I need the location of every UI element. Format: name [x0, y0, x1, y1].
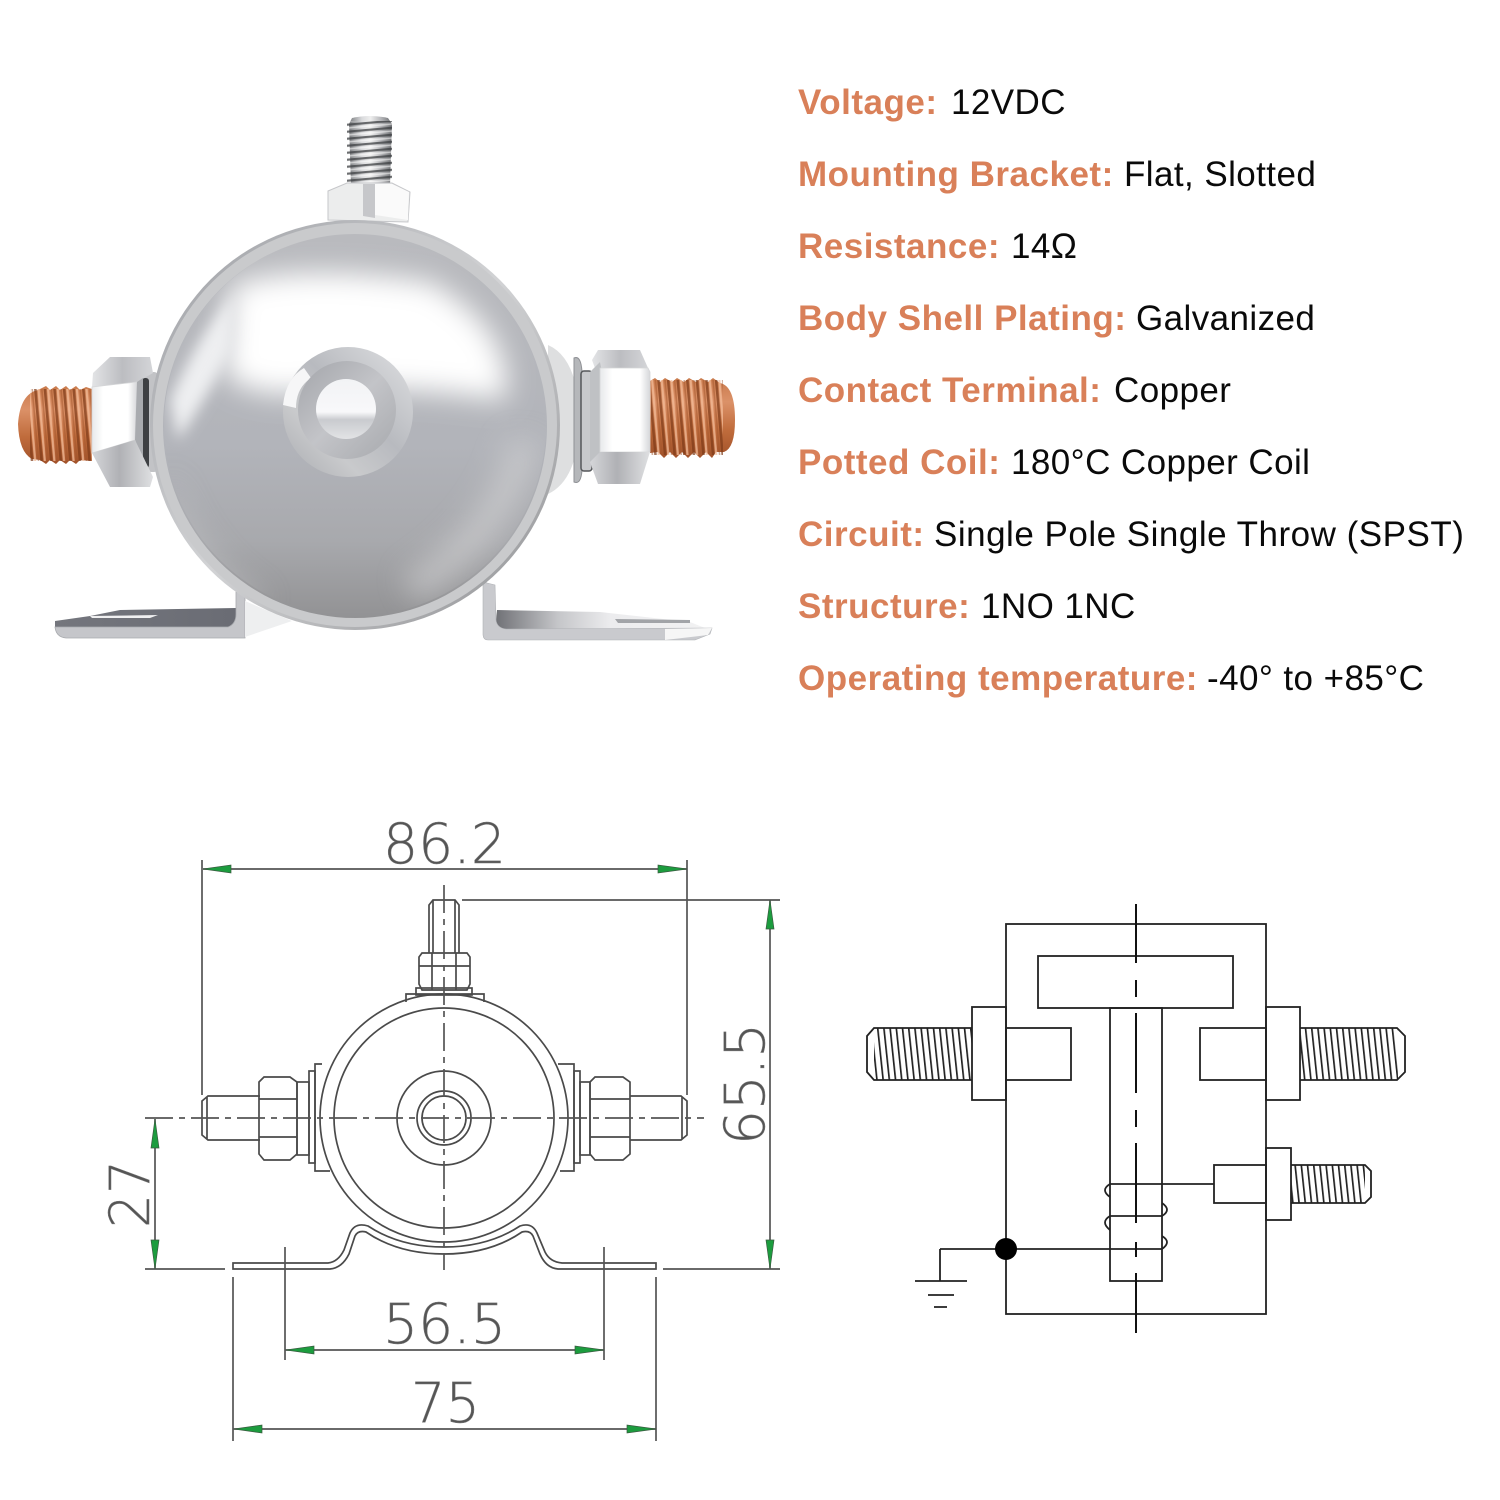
- schematic: housing: [1006, 924, 1266, 1314]
- spec: resistance: 14Ω: [1011, 227, 1077, 266]
- dimension: 27: [98, 1119, 225, 1269]
- centre lines: [145, 885, 704, 1270]
- drawing: solenoid outline: [202, 900, 687, 1242]
- spec: mounting bracket: Mounting Bracket:: [798, 155, 1114, 194]
- left hex nut: [92, 357, 158, 487]
- left copper terminal: [18, 386, 92, 464]
- spec: operating temperature: Operating temperature:: [798, 659, 1198, 698]
- spec: body shell plating: Galvanized: [1136, 299, 1315, 338]
- dimension: 65.5: [462, 900, 780, 1269]
- spec: resistance: Resistance:: [798, 227, 1000, 266]
- spec: structure: 1NO 1NC: [981, 587, 1136, 626]
- panel: product photo of solenoid: [18, 116, 735, 640]
- schematic: contact bar and plunger: [1038, 956, 1233, 1281]
- schematic: centre line: [1135, 904, 1137, 1333]
- top hex nut: [328, 183, 410, 222]
- dimension: 86.2: [202, 812, 687, 1095]
- right copper terminal: [650, 378, 735, 458]
- top threaded stud: [347, 116, 392, 186]
- drawing: mounting bracket: [233, 1225, 656, 1269]
- spec: circuit: Circuit:: [798, 515, 924, 554]
- schematic: coil terminal: [1214, 1148, 1371, 1220]
- dimension: 86.2: 86.2: [383, 812, 506, 876]
- spec: voltage: 12VDC: [951, 83, 1066, 122]
- dimension: 75: [233, 1277, 656, 1441]
- spec: potted coil: 180°C Copper Coil: [1011, 443, 1310, 482]
- spec: body shell plating: Body Shell Plating:: [798, 299, 1126, 338]
- panel: dimension drawing: [98, 812, 780, 1441]
- spec: structure: Structure:: [798, 587, 970, 626]
- left mounting foot: [55, 592, 292, 638]
- dimension: 56.5: [285, 1247, 604, 1360]
- dimension: 56.5: 56.5: [383, 1292, 506, 1356]
- spec: contact terminal: Contact Terminal:: [798, 371, 1101, 410]
- spec: operating temperature: -40° to +85°C: [1207, 659, 1424, 698]
- dimension: 65.5: 65.5: [713, 1023, 777, 1145]
- spec: mounting bracket: Flat, Slotted: [1124, 155, 1316, 194]
- centre boss: [283, 347, 413, 477]
- schematic: ground symbol: [915, 1249, 967, 1307]
- spec: potted coil: Potted Coil:: [798, 443, 1000, 482]
- right white insulator and washers: [548, 345, 592, 494]
- spec: contact terminal: Copper: [1114, 371, 1231, 410]
- schematic: coil windings: [940, 1184, 1214, 1249]
- dimension: 27: 27: [98, 1160, 162, 1228]
- schematic: right terminal: [1200, 1007, 1405, 1100]
- panel: specification list: [798, 83, 1464, 698]
- right mounting foot: [483, 582, 712, 640]
- panel: internal schematic: [867, 904, 1405, 1333]
- spec: circuit: Single Pole Single Throw (SPST): [934, 515, 1464, 554]
- dome shell: [150, 220, 560, 630]
- schematic: left terminal: [867, 1007, 1071, 1100]
- dimension: 75: 75: [411, 1371, 480, 1435]
- schematic: junction dot: [995, 1238, 1017, 1260]
- right hex nut: [590, 350, 650, 484]
- spec: voltage: Voltage:: [798, 83, 937, 122]
